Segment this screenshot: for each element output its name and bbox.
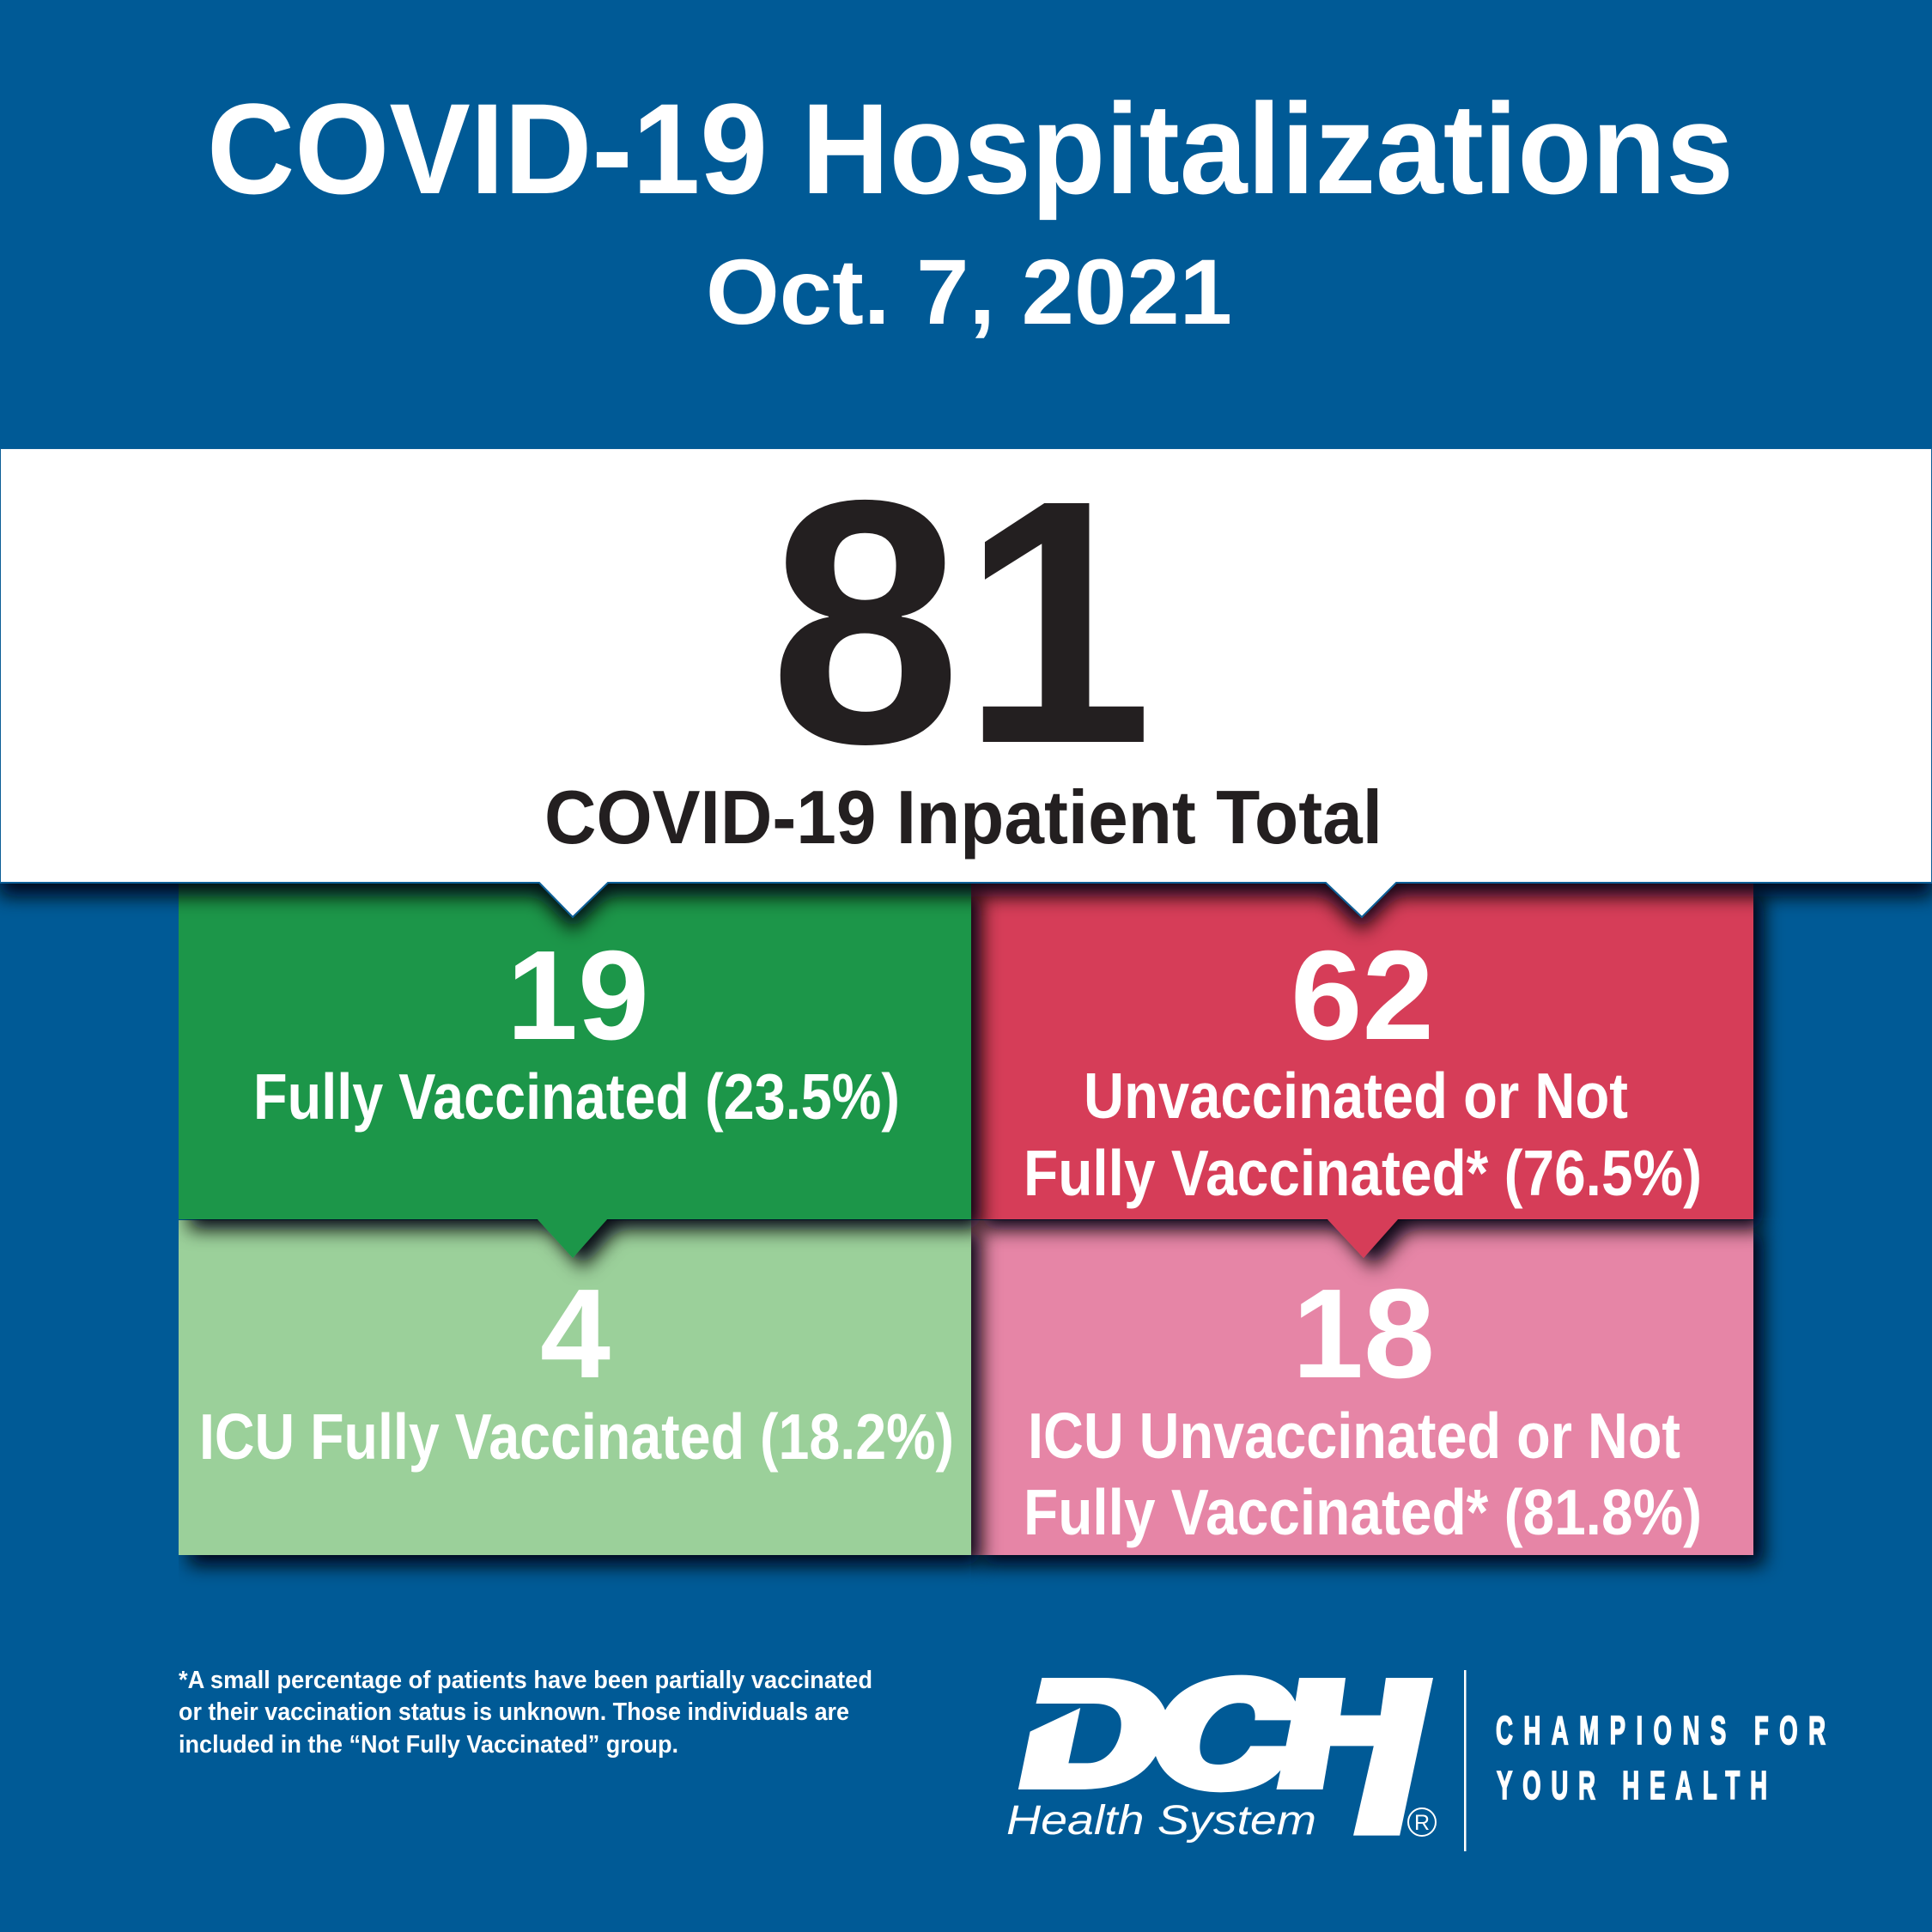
ICU unvaccinated label	[1024, 1400, 1702, 1548]
unvaccinated label: Unvaccinated or Not	[1084, 1060, 1628, 1132]
panel: ICU fully vaccinated	[179, 1220, 971, 1555]
panel: ICU unvaccinated	[971, 1220, 1753, 1555]
ICU vaccinated count: 4	[540, 1263, 611, 1405]
ICU unvaccinated label: Fully Vaccinated* (81.8%)	[1024, 1476, 1702, 1548]
divider	[1464, 1670, 1467, 1851]
unvaccinated label	[1024, 1060, 1702, 1209]
title: COVID-19 Hospitalizations	[207, 76, 1734, 221]
total count: 81	[769, 428, 1153, 816]
ICU vaccinated label: ICU Fully Vaccinated (18.2%)	[199, 1400, 954, 1473]
panel: inpatient total band	[0, 428, 1932, 917]
icon: registered mark: R	[1414, 1811, 1430, 1835]
panel: unvaccinated	[971, 883, 1753, 1258]
icon: DCH letters	[1018, 1675, 1433, 1836]
vaccinated label: Fully Vaccinated (23.5%)	[253, 1060, 900, 1133]
panel: fully vaccinated	[179, 883, 971, 1258]
tagline: CHAMPIONS FOR	[1496, 1710, 1826, 1753]
logo subtitle: Health System	[1006, 1798, 1316, 1844]
total label: COVID-19 Inpatient Total	[544, 775, 1382, 860]
unvaccinated label: Fully Vaccinated* (76.5%)	[1024, 1137, 1702, 1209]
ICU unvaccinated count: 18	[1292, 1263, 1435, 1405]
icon: registered mark	[1408, 1808, 1436, 1836]
footnote	[179, 1667, 872, 1759]
unvaccinated count: 62	[1291, 925, 1434, 1066]
tagline	[1496, 1710, 1826, 1808]
footnote: *A small percentage of patients have been partially vaccinated	[179, 1667, 872, 1694]
logo: DCH Health System	[1006, 1675, 1436, 1844]
date: Oct. 7, 2021	[706, 240, 1232, 343]
ICU unvaccinated label: ICU Unvaccinated or Not	[1028, 1400, 1680, 1472]
tagline: YOUR HEALTH	[1497, 1765, 1767, 1808]
vaccinated count: 19	[507, 925, 649, 1066]
footnote: or their vaccination status is unknown. Those individuals are	[179, 1698, 849, 1726]
footnote: included in the “Not Fully Vaccinated” group.	[179, 1731, 678, 1759]
